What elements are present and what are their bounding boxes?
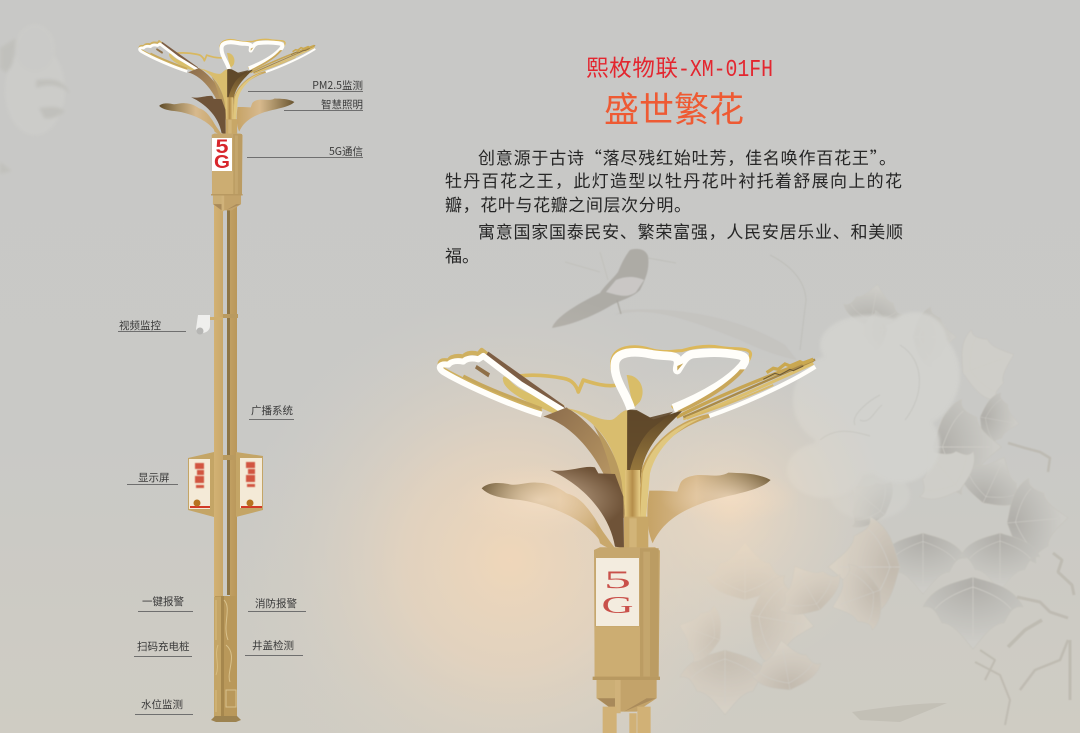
big 5G panel bbox=[596, 558, 639, 626]
description text: 创意源于古诗“落尽残红始吐芳，佳名唤作百花王”。 bbox=[478, 144, 896, 169]
small lamp pole bbox=[211, 200, 241, 722]
label: broadcast: 广播系统 bbox=[251, 403, 293, 418]
big lamp poles bbox=[603, 707, 651, 733]
label: manhole bbox=[245, 638, 303, 656]
label: PM2.5 bbox=[248, 78, 363, 93]
label: 5G: 5G通信 bbox=[329, 144, 363, 159]
label: video bbox=[118, 318, 186, 333]
small 5G panel: G bbox=[214, 152, 230, 172]
label: water: 水位监测 bbox=[141, 697, 183, 712]
model title bbox=[586, 51, 773, 84]
big 5G panel: G bbox=[602, 593, 634, 619]
pole shafts bbox=[214, 200, 237, 600]
label: screen: 显示屏 bbox=[138, 470, 170, 485]
glow: lamp light left bbox=[240, 290, 780, 733]
big lamp bbox=[440, 346, 815, 733]
icon: camera bbox=[196, 315, 223, 334]
description text: 牡丹百花之王，此灯造型以牡丹花叶衬托着舒展向上的花 bbox=[445, 167, 902, 192]
big 5G panel: 5 bbox=[604, 567, 631, 594]
glow: lamp light right bbox=[570, 350, 890, 670]
label: 5G bbox=[247, 144, 363, 159]
label: PM2.5: PM2.5监测 bbox=[312, 78, 363, 93]
display screen left bbox=[188, 452, 214, 517]
watermark: peony flowers and leaves bbox=[669, 279, 1072, 715]
description text: 寓意国家国泰民安、繁荣富强，人民安居乐业、和美顺 bbox=[478, 218, 903, 243]
watermark: peony details bbox=[820, 345, 919, 440]
watermark: brush streak bbox=[852, 703, 947, 722]
watermark: top-left flower bbox=[0, 24, 70, 174]
label: alarm bbox=[138, 594, 193, 612]
label: screen bbox=[127, 470, 178, 485]
display screen right bbox=[236, 452, 263, 517]
labels bbox=[118, 78, 363, 714]
main title: 盛世繁花 bbox=[604, 82, 744, 133]
small 5G panel bbox=[212, 137, 232, 172]
model title: 熙枚物联 bbox=[586, 51, 678, 83]
label: smart lighting bbox=[284, 97, 363, 112]
model title: -XM-01FH bbox=[678, 57, 773, 84]
label: alarm: 一键报警 bbox=[142, 594, 184, 609]
glow over left leaf bbox=[455, 462, 625, 538]
small lamp head bbox=[140, 39, 315, 211]
description text: 福。 bbox=[445, 242, 479, 267]
label: manhole: 井盖检测 bbox=[252, 638, 294, 653]
pole base bbox=[215, 596, 237, 718]
label: water bbox=[135, 697, 193, 714]
small 5G panel: 5 bbox=[216, 137, 229, 158]
description text: 瓣，花叶与花瓣之间层次分明。 bbox=[445, 191, 691, 216]
glow over right leaf bbox=[660, 469, 800, 525]
watermark: rocks bbox=[975, 443, 1074, 725]
label: smart lighting: 智慧照明 bbox=[321, 97, 363, 112]
label: charging: 扫码充电桩 bbox=[137, 639, 190, 654]
label: video: 视频监控 bbox=[119, 318, 161, 333]
label: fire: 消防报警 bbox=[255, 596, 297, 611]
description text bbox=[445, 144, 903, 267]
watermark: magpie and branches bbox=[552, 249, 806, 360]
